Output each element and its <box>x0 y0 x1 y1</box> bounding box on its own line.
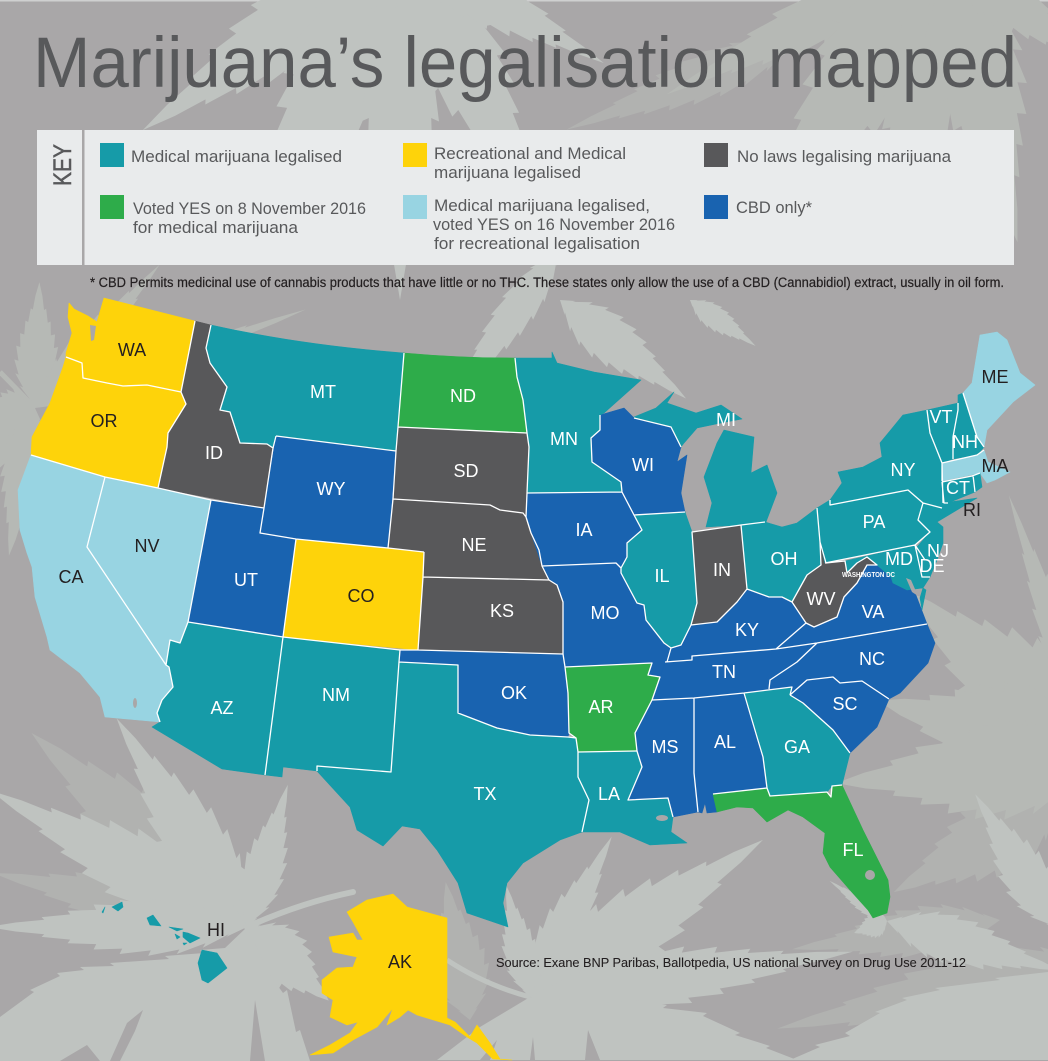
state: NY <box>830 410 977 522</box>
state: NJ <box>917 503 949 561</box>
state: FL: FL <box>842 840 864 860</box>
state: GA <box>744 687 850 796</box>
state: OH <box>741 508 821 602</box>
state: MN <box>515 352 641 493</box>
state: FL <box>713 785 890 918</box>
state: IA <box>526 492 642 568</box>
state: TN: TN <box>712 662 736 682</box>
state: CO: CO <box>348 586 374 606</box>
state: NC <box>769 624 935 699</box>
state: DE: DE <box>919 556 945 576</box>
state: WY: WY <box>316 479 346 499</box>
state: MA: MA <box>982 456 1008 476</box>
state: SD <box>393 427 529 517</box>
state: AR: AR <box>588 697 614 717</box>
state: NH <box>952 393 984 459</box>
state: VA <box>776 565 927 649</box>
state: NC: NC <box>859 649 885 669</box>
state: SD: SD <box>453 461 479 481</box>
state: WA <box>66 298 195 392</box>
state: AL: AL <box>714 732 736 752</box>
key item: medical plus recreational vote: Medical marijuana legalised, <box>434 197 650 215</box>
state: NE <box>388 499 549 580</box>
state: DE <box>915 545 945 610</box>
state: OR <box>31 357 186 488</box>
state: CA: CA <box>58 567 84 587</box>
state: MD <box>845 545 930 590</box>
key item: medical: Medical marijuana legalised <box>131 148 342 166</box>
state: KS <box>418 577 563 654</box>
state: CA <box>18 455 173 722</box>
state: OR: OR <box>90 411 118 431</box>
state: PA <box>817 490 930 563</box>
state: WA: WA <box>118 340 146 360</box>
key item: medical plus recreational vote: voted YES on 16 November 2016 <box>433 216 675 234</box>
state: ID <box>158 321 273 508</box>
key item: voted yes: Voted YES on 8 November 2016 <box>133 200 366 218</box>
source: Source: Exane BNP Paribas, Ballotpedia, US national Survey on Drug Use 2011-12 <box>496 955 966 970</box>
state: NV: NV <box>134 536 160 556</box>
state: WV: WV <box>806 589 836 609</box>
footnote: * CBD Permits medicinal use of cannabis products that have little or no THC. These states only allow the use of a CBD (Cannabidiol) extract, usually in oil form. <box>90 275 1004 290</box>
state: AK <box>310 894 512 1060</box>
state: SC <box>790 677 889 753</box>
state: ND <box>398 353 527 433</box>
state: SC: SC <box>832 694 858 714</box>
state: CT: CT <box>946 478 970 498</box>
key item: no laws <box>704 143 952 167</box>
state: MT <box>206 325 404 451</box>
state: MO: MO <box>590 603 620 623</box>
state: AK: AK <box>388 952 412 972</box>
state: NJ: NJ <box>927 541 949 561</box>
state: TX <box>317 662 589 927</box>
state: GA: GA <box>784 737 810 757</box>
state: VA: VA <box>862 602 884 622</box>
state: NY: NY <box>890 460 916 480</box>
state: WV <box>792 542 877 627</box>
state: NV <box>87 477 211 665</box>
state: WI <box>591 408 687 515</box>
state: VT: VT <box>929 407 953 427</box>
title: Marijuana’s legalisation mapped <box>33 24 1017 103</box>
key item: CBD only: CBD only* <box>736 199 813 217</box>
state: AL <box>694 693 767 813</box>
state: UT: UT <box>234 570 258 590</box>
state: TN <box>652 643 817 700</box>
state: NH: NH <box>952 432 978 452</box>
state: IN <box>691 525 747 625</box>
state: CO <box>283 539 424 650</box>
state: LA: LA <box>598 784 620 804</box>
key item: recreational and medical: marijuana legalised <box>434 164 581 182</box>
state: IL <box>621 512 697 648</box>
state: LA <box>578 751 687 845</box>
state borders <box>31 321 984 832</box>
key item: recreational and medical <box>403 143 626 182</box>
state: MT: MT <box>310 382 336 402</box>
key heading: KEY <box>49 144 77 186</box>
state: MS <box>628 698 698 817</box>
state: IN: IN <box>713 560 731 580</box>
state: MA <box>942 450 1010 483</box>
state: NM: NM <box>322 685 350 705</box>
key item: CBD only <box>704 195 813 219</box>
state: AZ <box>152 622 283 775</box>
state: AZ: AZ <box>210 698 234 718</box>
state: MO <box>542 563 671 677</box>
state: KY <box>667 589 806 662</box>
state: RI: RI <box>963 500 981 520</box>
state: ME: ME <box>982 367 1008 387</box>
state: IL: IL <box>654 566 670 586</box>
state: MN: MN <box>550 429 578 449</box>
panel: key <box>37 130 1014 265</box>
key item: recreational and medical: Recreational and Medical <box>434 145 626 163</box>
state: RI <box>963 473 982 520</box>
state: OH: OH <box>770 549 798 569</box>
state: KS: KS <box>490 601 514 621</box>
key item: medical <box>100 143 342 167</box>
state: ME <box>963 332 1035 447</box>
key item: medical plus recreational vote: for recreational legalisation <box>434 235 640 253</box>
state: KY: KY <box>735 620 759 640</box>
state: MI <box>634 392 777 527</box>
state: TX: TX <box>473 784 497 804</box>
key item: no laws: No laws legalising marijuana <box>737 148 952 166</box>
US map <box>18 298 1035 1060</box>
state: HI: HI <box>207 920 225 940</box>
state: ID: ID <box>205 443 223 463</box>
key item: medical plus recreational vote <box>403 195 675 253</box>
state: AR <box>565 663 660 752</box>
label: Washington DC: WASHINGTON DC <box>842 570 895 579</box>
state: PA: PA <box>863 512 885 532</box>
state: OK: OK <box>501 683 527 703</box>
state: WI: WI <box>632 455 654 475</box>
state: MD: MD <box>885 549 913 569</box>
key item: voted yes <box>100 195 366 237</box>
state: ND: ND <box>450 386 476 406</box>
state: VT <box>927 403 958 463</box>
state: WY <box>260 436 396 548</box>
state: NE: NE <box>461 535 487 555</box>
key item: voted yes: for medical marijuana <box>133 219 299 237</box>
state: IA: IA <box>575 520 593 540</box>
state: NM <box>265 637 400 777</box>
state: UT <box>188 500 296 637</box>
state: OK <box>399 650 569 737</box>
state: MS: MS <box>652 737 678 757</box>
state: CT <box>942 476 975 503</box>
state: MI: MI <box>716 410 736 430</box>
water bodies <box>90 325 918 880</box>
state: HI <box>102 902 227 983</box>
